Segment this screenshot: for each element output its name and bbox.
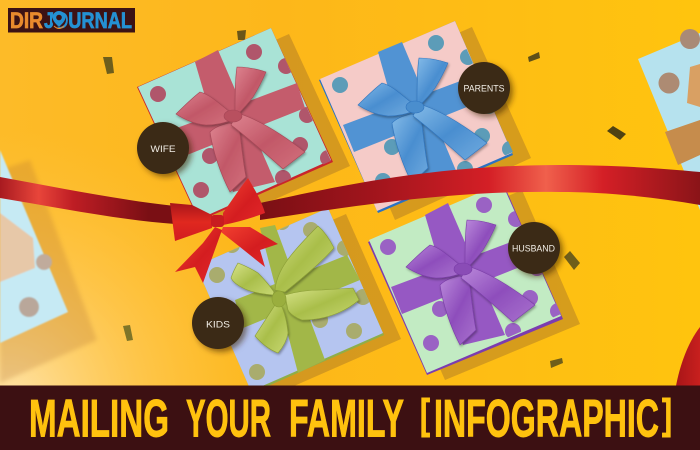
gift: parents xyxy=(319,21,531,220)
title: ] xyxy=(662,390,672,438)
logo: DirJournal xyxy=(8,8,135,33)
bow: husband xyxy=(406,220,535,345)
label: kids xyxy=(192,297,244,349)
dots: kids xyxy=(209,214,371,380)
box: kids xyxy=(196,208,383,391)
gift: husband xyxy=(368,183,580,380)
blurred gift at left edge xyxy=(0,150,97,383)
label: parents: PARENTS xyxy=(464,84,504,94)
dots: parents xyxy=(332,35,518,189)
box: parents xyxy=(320,21,512,211)
title: FAMILY xyxy=(289,390,404,448)
dots: wife xyxy=(150,44,336,198)
red ribbon across the page xyxy=(0,165,700,224)
logo: DirJournal: DIR xyxy=(10,8,43,33)
title xyxy=(29,390,672,448)
title banner xyxy=(0,386,700,450)
gift: kids xyxy=(203,210,401,386)
label: husband: HUSBAND xyxy=(512,244,555,254)
bow: wife xyxy=(176,67,305,192)
ribbon bands: wife xyxy=(161,50,305,192)
box: husband xyxy=(369,183,561,373)
gift: wife xyxy=(137,28,350,225)
ribbon bands: kids xyxy=(235,225,360,373)
dots: husband xyxy=(380,197,566,351)
label: husband xyxy=(508,222,560,274)
ribbon bands: parents xyxy=(343,42,487,183)
title: YOUR xyxy=(186,390,271,448)
red cloth at bottom right xyxy=(676,327,700,386)
label: kids: KIDS xyxy=(206,320,230,330)
bow: parents xyxy=(358,58,487,183)
logo: DirJournal: JOURNAL xyxy=(44,8,132,33)
red bow xyxy=(170,178,278,283)
bow: kids xyxy=(231,226,359,353)
label: wife xyxy=(137,122,189,174)
gift at right edge xyxy=(638,29,700,210)
title: MAILING xyxy=(29,390,169,448)
label: wife: WIFE xyxy=(150,144,176,155)
confetti xyxy=(103,30,626,368)
box: wife xyxy=(138,28,331,219)
icon: map pin xyxy=(52,11,66,28)
ribbon bands: husband xyxy=(391,203,535,345)
title: [ xyxy=(420,390,430,438)
label: parents xyxy=(458,62,510,114)
